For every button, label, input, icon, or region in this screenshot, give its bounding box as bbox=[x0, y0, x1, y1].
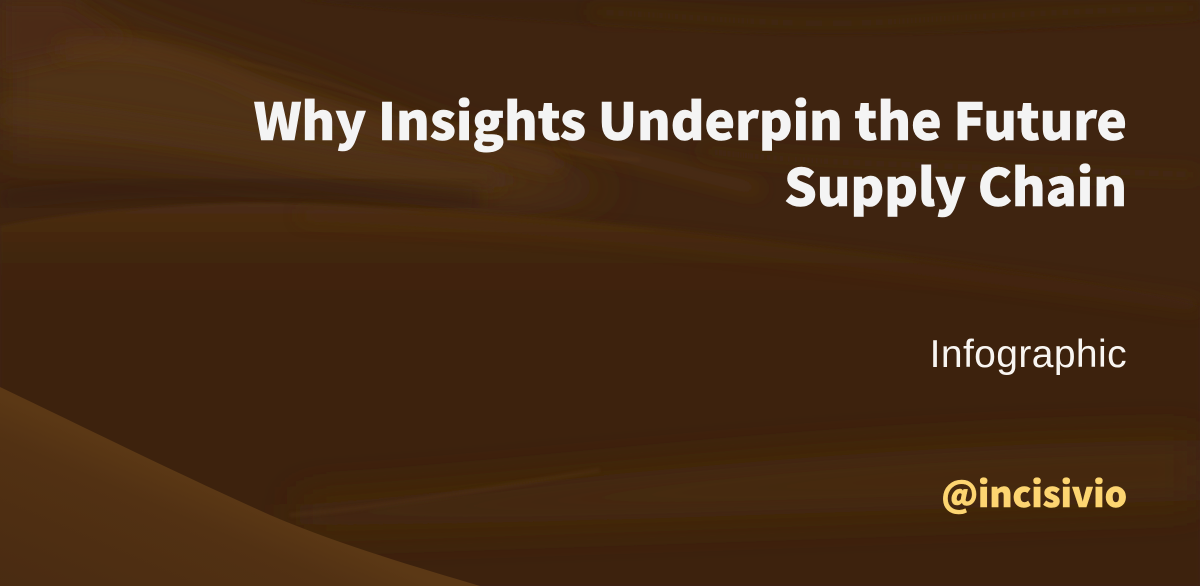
subtitle: Infographic: Infographic bbox=[930, 333, 1127, 376]
lower-right haze and streak bbox=[300, 440, 1200, 530]
central dune bbox=[0, 203, 1200, 586]
lower-left dune bbox=[0, 387, 480, 586]
title: Supply Chain bbox=[784, 146, 1127, 221]
top-right dark wedge bbox=[300, 0, 1200, 34]
title bbox=[254, 80, 1127, 221]
thin lit streaks near title bbox=[230, 60, 640, 160]
upper-left lit slope bbox=[0, 0, 620, 205]
title: Why Insights Underpin the Future bbox=[254, 80, 1127, 155]
handle: @incisivio: @incisivio bbox=[941, 467, 1127, 518]
